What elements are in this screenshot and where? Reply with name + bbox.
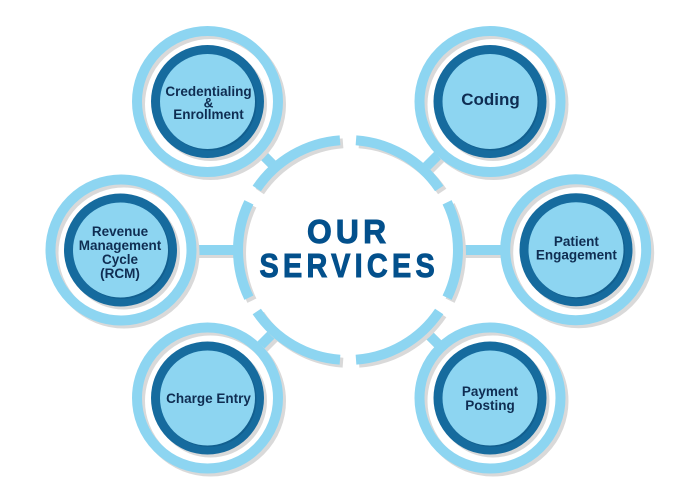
title	[260, 212, 439, 285]
title: OUR	[307, 212, 390, 250]
node: Revenue Management Cycle (RCM): Cycle	[102, 252, 139, 267]
node: Payment Posting: Payment	[462, 384, 519, 399]
node: Revenue Management Cycle (RCM): (RCM)	[100, 266, 140, 281]
title: SERVICES	[260, 247, 439, 285]
node: Revenue Management Cycle (RCM): Revenue	[92, 224, 149, 239]
node: Revenue Management Cycle (RCM): Management	[79, 238, 162, 253]
node: Coding: Coding	[461, 90, 520, 109]
node: Payment Posting	[420, 328, 560, 468]
node: Payment Posting: Posting	[465, 398, 515, 413]
connectors	[192, 150, 505, 348]
node: Revenue Management Cycle (RCM)	[50, 180, 192, 320]
node: Credentialing & Enrollment	[137, 31, 278, 172]
node: Credentialing & Enrollment: Credentialing	[165, 84, 252, 99]
node: Patient Engagement	[505, 179, 646, 320]
node: Credentialing & Enrollment: Enrollment	[173, 107, 244, 122]
node: Charge Entry	[137, 328, 278, 468]
central ring arcs	[238, 140, 458, 360]
node: Coding	[420, 31, 560, 172]
node: Patient Engagement: Patient	[554, 234, 599, 249]
node: Patient Engagement: Engagement	[536, 247, 617, 262]
node: Charge Entry: Charge Entry	[166, 391, 251, 406]
node: Credentialing & Enrollment: &	[204, 96, 214, 110]
